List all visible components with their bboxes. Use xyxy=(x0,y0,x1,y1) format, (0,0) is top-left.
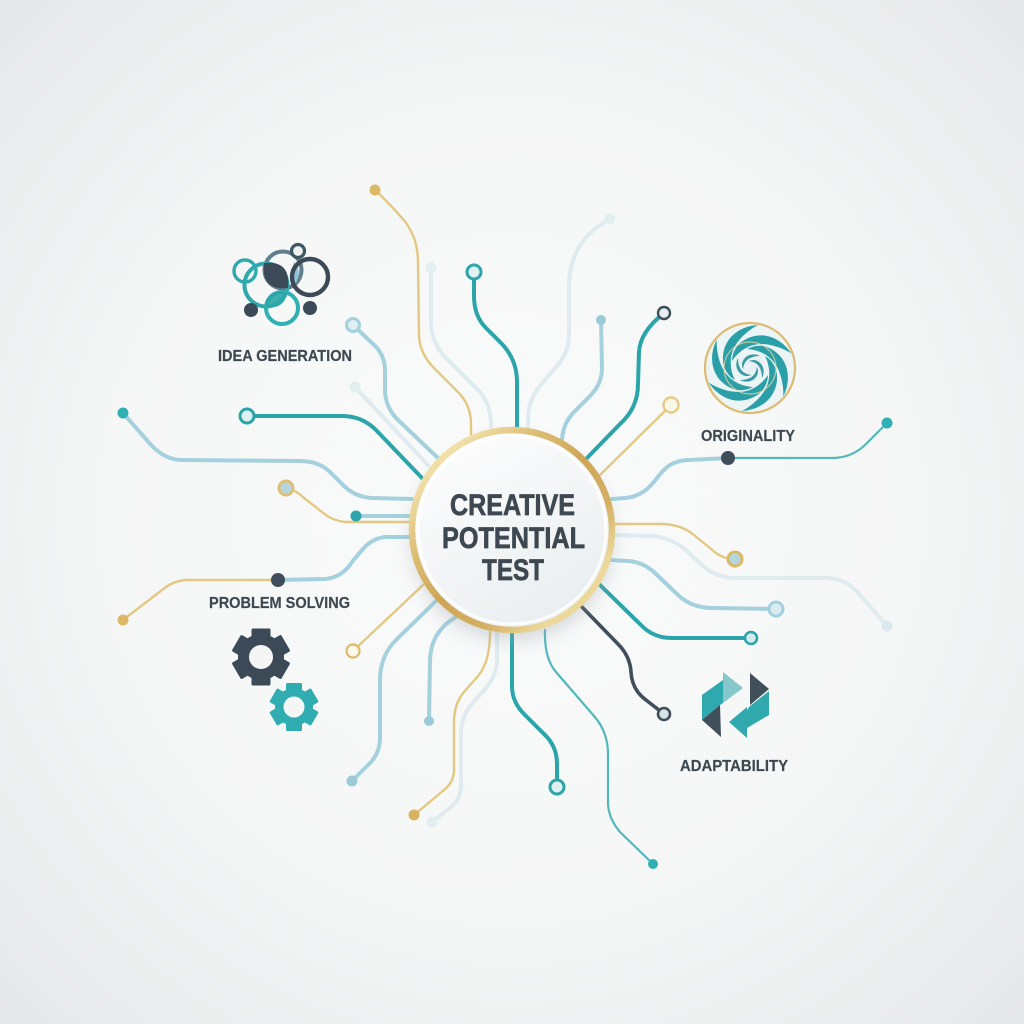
title: TEST xyxy=(482,554,544,587)
label: originality: ORIGINALITY xyxy=(701,428,795,445)
title xyxy=(442,489,585,587)
title: POTENTIAL xyxy=(442,522,585,555)
connector network xyxy=(123,190,887,864)
dark connector xyxy=(582,607,664,714)
label: problem solving: PROBLEM SOLVING xyxy=(209,595,350,612)
label: adaptability: ADAPTABILITY xyxy=(680,758,788,775)
label: idea generation: IDEA GENERATION xyxy=(218,348,352,365)
thin teal connectors xyxy=(545,423,887,864)
connector end nodes xyxy=(118,184,892,869)
gold connectors xyxy=(123,190,735,815)
title: CREATIVE xyxy=(450,489,575,522)
icon: problem solving gears xyxy=(232,628,319,731)
icon: originality spiral xyxy=(699,323,801,413)
light blue connectors xyxy=(123,320,776,781)
pale connectors xyxy=(355,219,887,822)
teal connectors xyxy=(247,272,751,787)
icon: adaptability arrows xyxy=(702,672,769,738)
central hub xyxy=(412,430,612,640)
icon: idea generation circles xyxy=(234,244,328,324)
